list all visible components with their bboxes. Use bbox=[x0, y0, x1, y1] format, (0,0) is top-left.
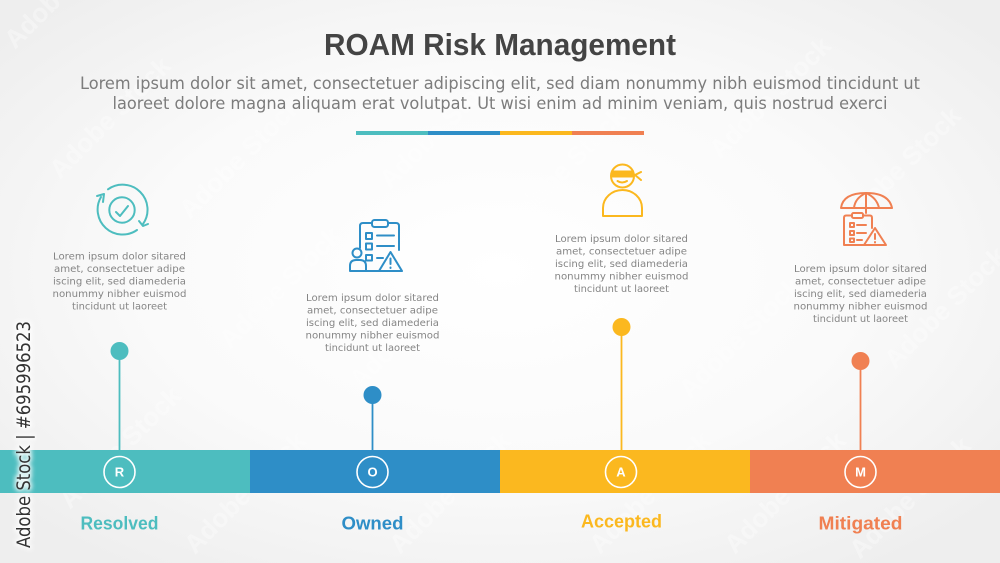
description: nonummy nibher euismod bbox=[554, 272, 688, 282]
description: amet, consectetuer adipe bbox=[54, 264, 185, 275]
text: Adobe Stock bbox=[703, 30, 837, 164]
timeline band bbox=[0, 450, 1000, 493]
description: Lorem ipsum dolor sitared bbox=[794, 264, 927, 275]
description: tincidunt ut laoreet bbox=[574, 284, 669, 295]
text: Adobe Stock bbox=[383, 425, 517, 559]
badge A: A bbox=[616, 464, 626, 480]
description: amet, consectetuer adipe bbox=[556, 246, 687, 258]
description: nonummy nibher euismod bbox=[306, 330, 440, 342]
title: ROAM Risk Management bbox=[324, 27, 676, 62]
text: Adobe Stock bbox=[498, 100, 632, 234]
pin bbox=[852, 352, 870, 450]
text: Adobe Stock bbox=[43, 50, 177, 184]
icon: person with bandana bbox=[603, 164, 642, 216]
description bbox=[52, 252, 186, 312]
badge R bbox=[104, 456, 135, 488]
label: Accepted bbox=[581, 512, 662, 532]
description: tincidunt ut laoreet bbox=[72, 302, 167, 312]
text: Adobe Stock bbox=[178, 425, 312, 559]
description bbox=[794, 264, 928, 325]
label: Mitigated bbox=[818, 514, 902, 534]
icon: umbrella over clipboard with warning bbox=[841, 193, 892, 245]
description bbox=[306, 293, 440, 354]
description: tincidunt ut laoreet bbox=[325, 343, 420, 354]
text: Adobe Stock bbox=[583, 425, 717, 559]
intro text bbox=[80, 74, 921, 113]
text: Adobe Stock bbox=[543, 230, 677, 364]
intro text: laoreet dolore magna aliquam erat volutpat. Ut wisi enim ad minim veniam, quis nostrud exerci bbox=[112, 94, 888, 113]
icon: clipboard with person and warning bbox=[350, 220, 402, 271]
badge O: O bbox=[367, 464, 378, 480]
text: Adobe Stock bbox=[213, 220, 347, 354]
text: Adobe Stock bbox=[53, 380, 187, 514]
pin bbox=[612, 318, 630, 450]
column: Accepted bbox=[554, 164, 688, 532]
description: iscing elit, sed diamederia bbox=[794, 289, 927, 300]
description: iscing elit, sed diamederia bbox=[555, 259, 688, 270]
description: tincidunt ut laoreet bbox=[813, 314, 908, 325]
text: Adobe Stock bbox=[343, 260, 477, 394]
text: Adobe Stock bbox=[173, 90, 307, 224]
pin bbox=[364, 386, 382, 450]
stock id side label: Adobe Stock | #695996523 bbox=[13, 321, 35, 548]
stock id side label: Adobe Stock | #695996523 bbox=[13, 321, 35, 548]
badge O bbox=[357, 456, 388, 488]
text: Adobe Stock bbox=[718, 425, 852, 559]
column: Owned bbox=[306, 220, 440, 534]
pin bbox=[110, 342, 128, 450]
badge M: M bbox=[855, 464, 866, 480]
description: Lorem ipsum dolor sitared bbox=[555, 234, 688, 245]
text: Adobe Stock bbox=[373, 60, 507, 194]
description: amet, consectetuer adipe bbox=[307, 306, 438, 316]
text: Adobe Stock bbox=[833, 100, 967, 234]
description: amet, consectetuer adipe bbox=[795, 276, 926, 288]
four-colour divider bbox=[356, 131, 644, 135]
column: Resolved bbox=[52, 185, 186, 533]
label: Owned bbox=[342, 514, 404, 534]
text: Adobe Stock bbox=[843, 430, 977, 563]
description: iscing elit, sed diamederia bbox=[306, 318, 439, 329]
intro text: Lorem ipsum dolor sit amet, consectetuer adipiscing elit, sed diam nonummy nibh euismod tincidunt ut bbox=[80, 74, 921, 93]
description bbox=[554, 234, 688, 295]
description: nonummy nibher euismod bbox=[52, 289, 186, 300]
badge A bbox=[606, 456, 636, 488]
description: iscing elit, sed diamederia bbox=[53, 276, 186, 288]
badge R: R bbox=[115, 464, 125, 480]
description: nonummy nibher euismod bbox=[794, 302, 928, 312]
label: Resolved bbox=[80, 514, 158, 534]
description: Lorem ipsum dolor sitared bbox=[306, 293, 439, 304]
column: Mitigated bbox=[794, 193, 928, 534]
icon: rotating check bbox=[97, 185, 148, 235]
description: Lorem ipsum dolor sitared bbox=[53, 252, 186, 262]
badge M bbox=[845, 456, 876, 488]
text: Adobe Stock bbox=[673, 270, 807, 404]
